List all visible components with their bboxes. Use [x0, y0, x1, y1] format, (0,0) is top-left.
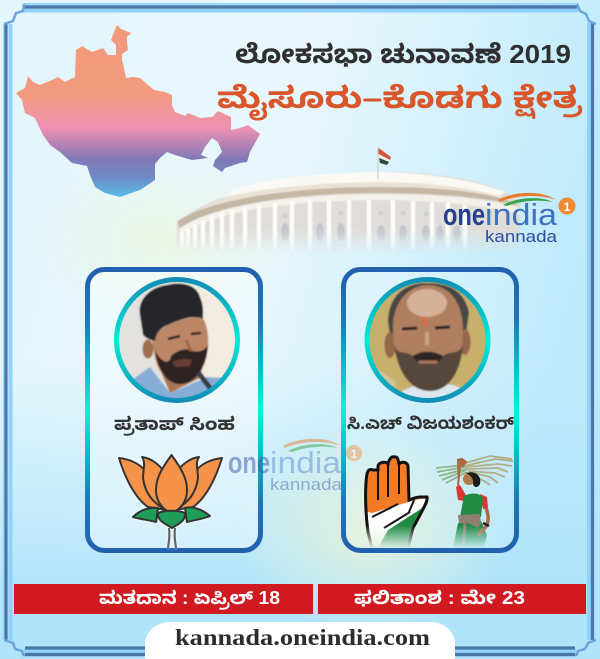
watermark: oneindia kannada: kannada [270, 475, 343, 494]
polling date bar: ಮತದಾನ : ಏಪ್ರಿಲ್ 18 [99, 588, 280, 610]
panel: candidate C.H. Vijayashankar [344, 270, 516, 550]
result date bar [318, 584, 586, 614]
watermark: oneindia kannada [228, 439, 362, 494]
website pill [145, 622, 455, 659]
watermark: oneindia kannada: 1 [351, 447, 358, 461]
result date bar: ಫಲಿತಾಂಶ : ಮೇ 23 [354, 588, 525, 608]
oneindia kannada logo: one [443, 197, 485, 232]
Karnataka map [16, 25, 260, 197]
watermark: oneindia kannada: one [228, 445, 270, 480]
oneindia kannada logo: kannada [485, 227, 558, 246]
parliament building illustration [177, 172, 520, 255]
portrait: Pratap Simha [114, 277, 240, 403]
icon: BJP lotus [119, 455, 222, 548]
title line 2: ಮೈಸೂರು–ಕೊಡಗು ಕ್ಷೇತ್ರ [217, 82, 583, 121]
icon: Congress hand [364, 455, 429, 547]
candidate name: ಪ್ರತಾಪ್ ಸಿಂಹ [114, 414, 235, 436]
watermark: oneindia kannada: india [270, 445, 342, 480]
title line 1: ಲೋಕಸಭಾ ಚುನಾವಣೆ 2019 [235, 39, 571, 69]
website pill: kannada.oneindia.com [175, 625, 430, 650]
flag on parliament [377, 147, 391, 179]
oneindia kannada logo: 1 [564, 200, 571, 214]
portrait: C.H. Vijayashankar [364, 277, 490, 403]
oneindia kannada logo: india [485, 197, 558, 232]
polling date bar [14, 584, 313, 614]
oneindia kannada logo [443, 193, 576, 246]
icon: JDS woman with paddy [436, 456, 513, 548]
panel: candidate Pratap Simha [88, 270, 260, 550]
candidate name: ಸಿ.ಎಚ್ ವಿಜಯಶಂಕರ್ [347, 414, 515, 433]
